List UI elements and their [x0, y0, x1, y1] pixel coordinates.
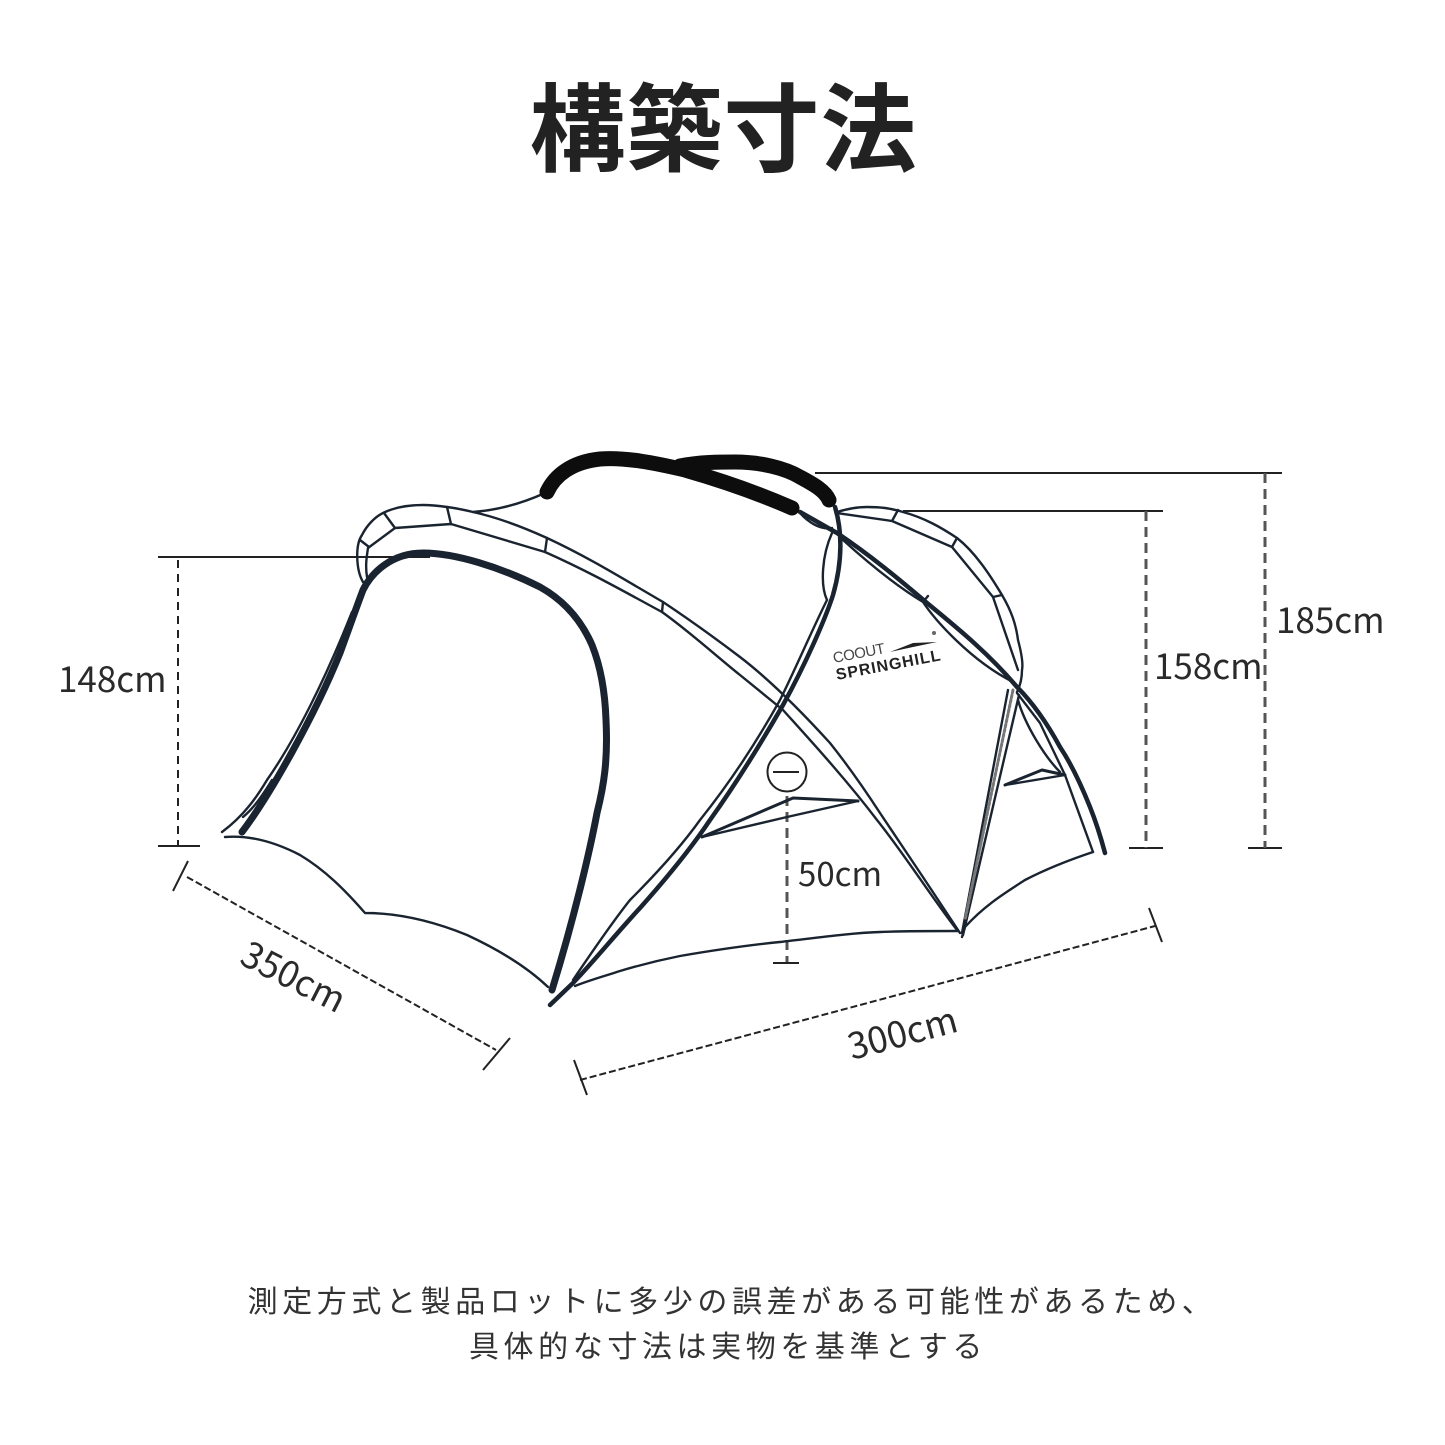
dimension label: 148cm: 148cm — [58, 652, 167, 703]
logo: COOUT — [832, 640, 886, 667]
front door arch — [242, 553, 607, 990]
footnote: 測定方式と製品ロットに多少の誤差がある可能性があるため、 — [248, 1286, 1216, 1319]
dimension label: 300cm: 300cm — [841, 992, 963, 1071]
floor edges — [225, 837, 548, 987]
main cross pole — [550, 507, 840, 1005]
rear awning inner edge — [837, 510, 1018, 670]
rear strut — [962, 690, 1019, 935]
awning segment ticks — [360, 507, 663, 612]
title: 構築寸法 — [530, 78, 918, 185]
front awning outer edge — [357, 505, 960, 933]
rear pole — [800, 512, 1105, 853]
front awning inner edge — [366, 524, 957, 930]
rope — [473, 493, 545, 512]
left door edge thin lines — [222, 612, 352, 832]
small oval near ridge — [800, 513, 832, 528]
dimension lines — [158, 473, 1282, 1095]
dimension label: 350cm: 350cm — [233, 926, 356, 1023]
cross pole inner lines — [573, 533, 832, 980]
dimension label: 185cm: 185cm — [1276, 593, 1385, 644]
ridge pole — [547, 459, 792, 508]
logo — [832, 631, 943, 684]
dimension label: 158cm: 158cm — [1154, 639, 1263, 690]
footnote — [248, 1286, 1216, 1364]
footnote: 具体的な寸法は実物を基準とする — [469, 1331, 987, 1364]
logo: SPRINGHILL — [835, 647, 943, 684]
rear lower edge lines — [843, 540, 1093, 852]
rear awning outer edge — [837, 507, 1022, 692]
tent outline — [222, 459, 1105, 1005]
dimension label: 50cm: 50cm — [798, 848, 882, 896]
vents — [702, 801, 858, 837]
